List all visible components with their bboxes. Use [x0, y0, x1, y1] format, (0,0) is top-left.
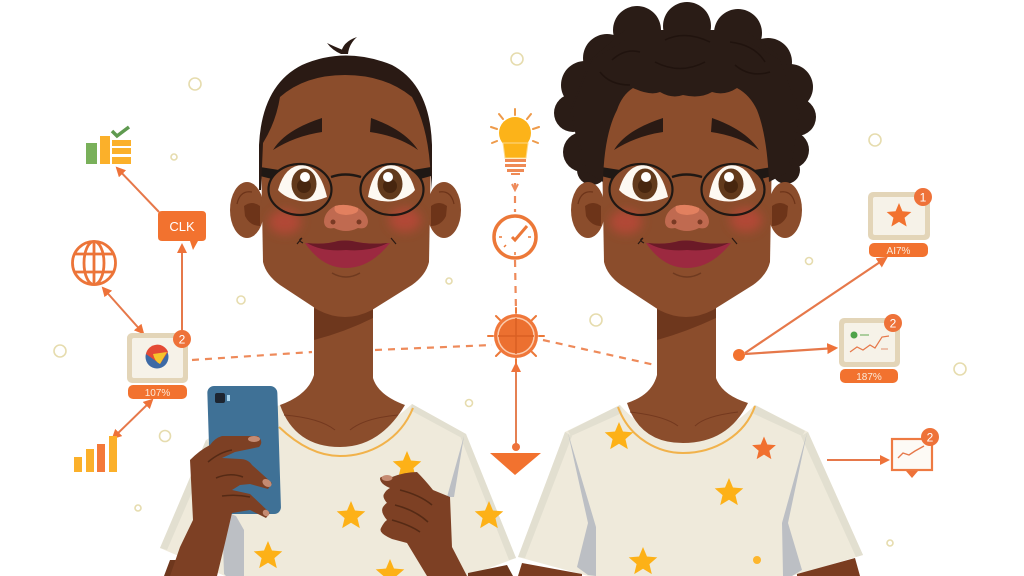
panel: star card: 1	[920, 190, 927, 204]
left shirt stars	[254, 451, 503, 576]
left hair	[259, 37, 432, 190]
panel: left card	[127, 330, 191, 399]
panel: star card	[868, 188, 932, 257]
arrow: bars to card	[113, 400, 152, 438]
icon: screen chart: 2	[927, 430, 934, 444]
person: right	[518, 2, 863, 576]
callout: CLK: CLK	[169, 219, 195, 234]
right head	[571, 72, 802, 317]
right hair lumps	[600, 35, 770, 85]
icon: sun globe	[488, 308, 544, 364]
icon: rising bars	[74, 436, 117, 472]
panel: line chart card: 187%	[856, 372, 882, 383]
panel: line chart card	[839, 314, 902, 383]
arrow: card to click	[181, 245, 183, 330]
sleeve skin	[164, 560, 513, 576]
panel: left card: 107%	[145, 388, 170, 399]
phone	[207, 386, 281, 514]
right shirt stars	[605, 422, 776, 574]
arrow: shirt to chart	[827, 459, 888, 461]
panel: left card: 2	[179, 332, 186, 346]
decorative dots	[54, 53, 966, 546]
icon: clock	[494, 216, 536, 258]
icon: bar chart with check	[86, 127, 131, 164]
right arms	[518, 558, 860, 576]
arrow: globe to card	[103, 288, 143, 333]
hand holding phone	[170, 436, 273, 576]
hub node and arrows	[733, 258, 886, 361]
arrow: click to chart	[117, 168, 159, 212]
person: left	[160, 37, 516, 576]
panel: line chart card: 2	[890, 316, 897, 330]
right shirt	[518, 405, 863, 576]
left head	[230, 72, 461, 317]
left neck	[280, 300, 405, 447]
panel: star card: AI7%	[887, 246, 911, 257]
left shirt	[160, 404, 516, 576]
icon: screen chart	[892, 428, 939, 478]
right neck	[627, 300, 748, 443]
right hair back	[554, 2, 816, 185]
arrow and triangle	[490, 364, 541, 475]
icon: lightbulb	[491, 109, 539, 190]
dashed connectors	[192, 183, 655, 365]
icon: globe	[72, 241, 116, 285]
hand on shirt	[380, 472, 467, 576]
right hair front	[572, 40, 798, 182]
callout: CLK	[158, 211, 206, 250]
